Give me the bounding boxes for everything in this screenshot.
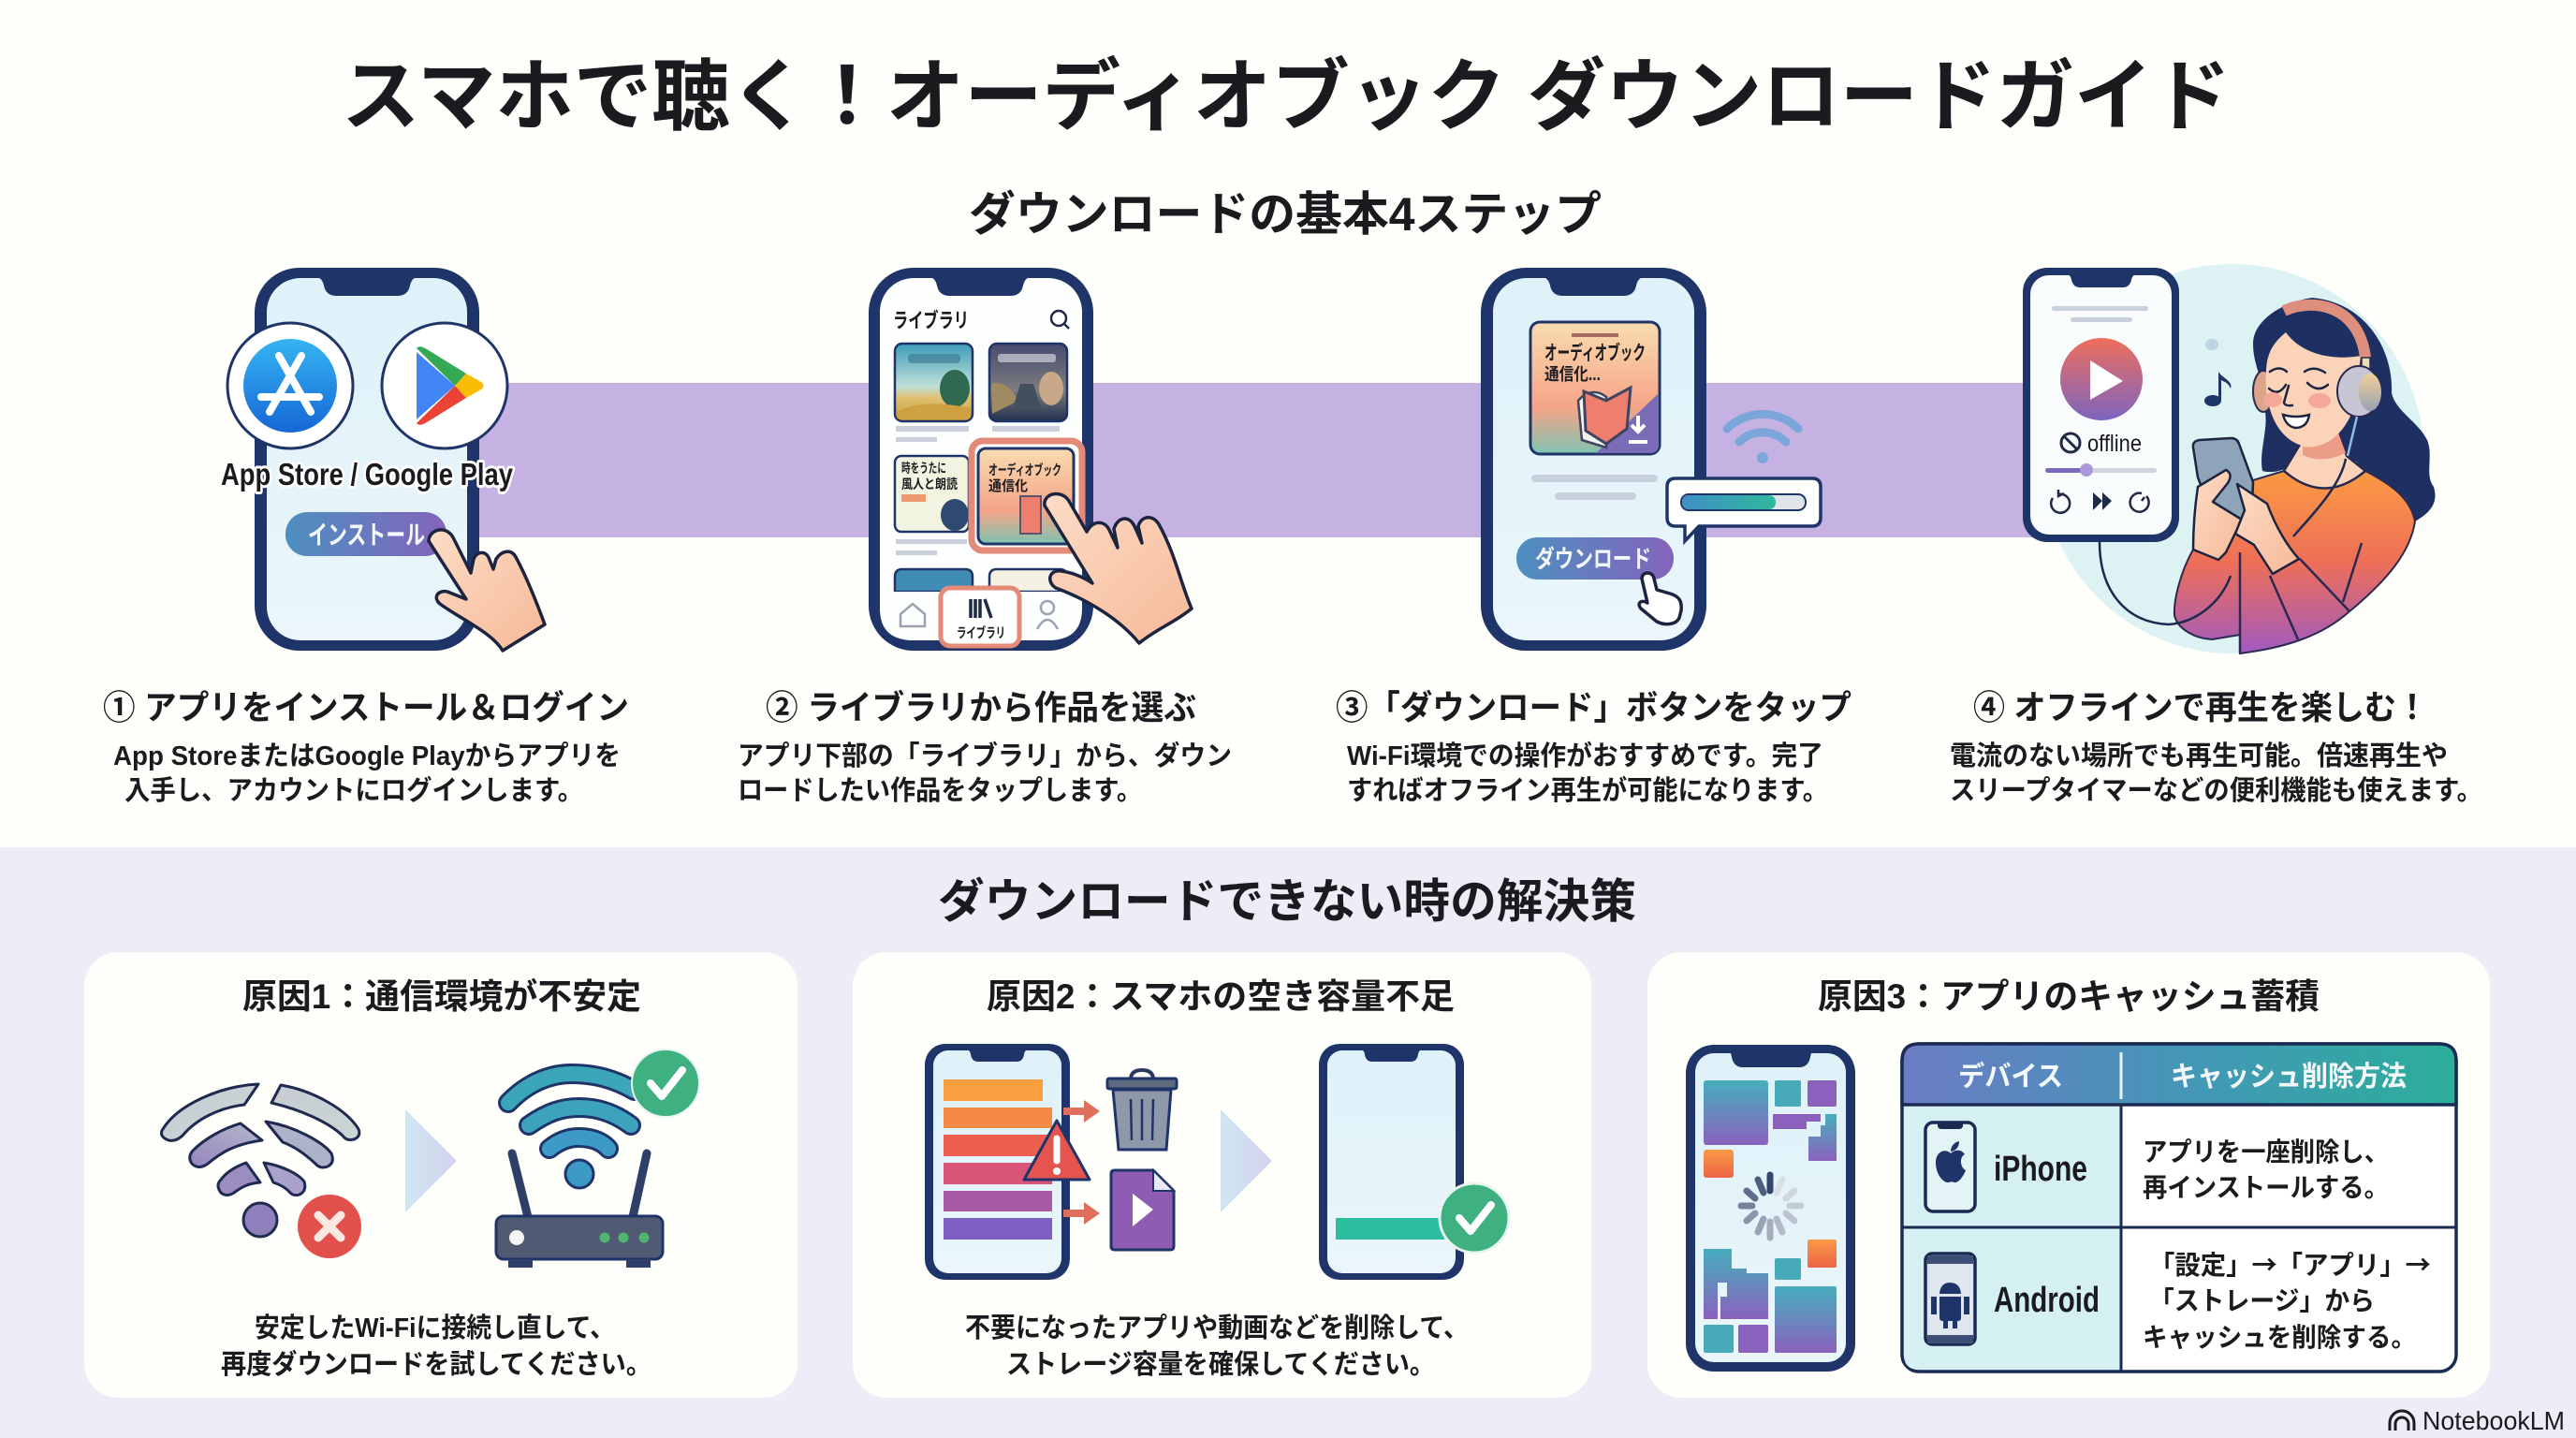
headband bbox=[2284, 305, 2365, 358]
row: Android: Android bbox=[1994, 1281, 2100, 1320]
row: Android bbox=[1925, 1245, 2431, 1352]
book cover with download mark bbox=[1530, 322, 1660, 454]
earphone wire bbox=[2348, 417, 2357, 456]
arrow to video file bbox=[1063, 1202, 1100, 1225]
phone 4 player bbox=[2023, 268, 2179, 542]
phone 3 bbox=[1481, 268, 1706, 651]
icon: router bbox=[496, 1153, 663, 1268]
book covers bbox=[895, 344, 1067, 592]
connecting purple band bbox=[468, 383, 2041, 537]
row: iPhone: 再インストールする。 bbox=[2143, 1173, 2389, 1202]
panel: cause 1 bbox=[84, 952, 798, 1398]
download button bbox=[1516, 537, 1674, 580]
step 1 description: 入手し、アカウントにログインします。 bbox=[124, 775, 583, 806]
step 2 description bbox=[738, 740, 1232, 806]
card title: 原因2：スマホの空き容量不足 bbox=[987, 977, 1455, 1016]
step 4 description: 電流のない場所でも再生可能。倍速再生や bbox=[1950, 741, 2448, 771]
step 4 text bbox=[1950, 688, 2482, 806]
progress bubble bbox=[1667, 478, 1821, 541]
face bbox=[2266, 332, 2361, 447]
card text: 再度ダウンロードを試してください。 bbox=[221, 1348, 651, 1380]
icon: healthy wifi bbox=[508, 1074, 635, 1188]
install button: インストール bbox=[308, 521, 425, 550]
icon: broken wifi bbox=[161, 1084, 359, 1237]
teal blob bbox=[2041, 264, 2424, 653]
clean phone bbox=[1319, 1044, 1464, 1280]
table header bbox=[1902, 1044, 2456, 1105]
blot bbox=[2205, 339, 2218, 350]
table header: キャッシュ削除方法 bbox=[2171, 1062, 2407, 1093]
card text bbox=[965, 1313, 1469, 1380]
step 3 description: すればオフライン再生が可能になります。 bbox=[1347, 774, 1828, 806]
icon: green check badge bbox=[1440, 1183, 1509, 1253]
cable bbox=[2100, 459, 2346, 624]
right hand bbox=[2235, 484, 2299, 574]
cover: person: 風人と朗読 bbox=[901, 477, 958, 492]
card text bbox=[221, 1313, 651, 1380]
step 2 description: ロードしたい作品をタップします。 bbox=[738, 775, 1142, 806]
woman with headphones bbox=[2174, 298, 2435, 653]
step 1 description bbox=[113, 741, 621, 806]
phone in hand bbox=[2193, 438, 2253, 534]
card text: ストレージ容量を確保してください。 bbox=[1006, 1349, 1435, 1380]
store label: App Store / Google Play bbox=[221, 457, 514, 492]
step 3 text bbox=[1336, 688, 1852, 806]
step 1 title: ① アプリをインストール＆ログイン bbox=[103, 688, 629, 726]
cheeks bbox=[2263, 392, 2282, 407]
row: iPhone: アプリを一座削除し、 bbox=[2143, 1137, 2389, 1167]
card title: 原因1：通信環境が不安定 bbox=[242, 977, 641, 1016]
section: basic 4 steps bbox=[103, 188, 2482, 806]
row: Android: キャッシュを削除する。 bbox=[2143, 1323, 2416, 1352]
section heading: ダウンロードできない時の解決策 bbox=[938, 875, 1636, 928]
hair bbox=[2253, 298, 2435, 521]
step 1 text bbox=[103, 688, 629, 806]
icon: loading spinner bbox=[1741, 1175, 1801, 1238]
icon: cursor hand bbox=[1639, 573, 1681, 624]
icon: NotebookLM bbox=[2390, 1411, 2414, 1431]
placeholder lines bbox=[1531, 475, 1658, 500]
step 4 illustration bbox=[2023, 264, 2435, 653]
panel: cause 2 bbox=[853, 952, 1591, 1398]
bottom tab bar bbox=[880, 588, 1082, 646]
highlighted book bbox=[972, 441, 1082, 550]
cover: landscape bbox=[895, 344, 973, 421]
watermark text: NotebookLM bbox=[2422, 1406, 2565, 1435]
highlighted book: オーディオブック bbox=[988, 462, 1061, 478]
step 2 description: アプリ下部の「ライブラリ」から、ダウン bbox=[738, 740, 1232, 771]
cover: dark road bbox=[989, 344, 1067, 421]
icon: video file bbox=[1111, 1170, 1174, 1250]
card bbox=[853, 952, 1591, 1398]
highlighted book: 通信化 bbox=[988, 478, 1028, 494]
icon: red cross badge bbox=[298, 1195, 361, 1258]
icon: green check badge bbox=[632, 1049, 699, 1117]
step 4 title: ④ オフラインで再生を楽しむ！ bbox=[1973, 688, 2428, 726]
NotebookLM watermark bbox=[2390, 1406, 2565, 1435]
card title: 原因3：アプリのキャッシュ蓄積 bbox=[1818, 977, 2320, 1016]
lavender background band bbox=[0, 847, 2576, 1438]
title: スマホで聴く！オーディオブック ダウンロードガイド bbox=[342, 52, 2231, 140]
step 1 description: App StoreまたはGoogle Playからアプリを bbox=[113, 741, 621, 771]
cache deletion table bbox=[1902, 1044, 2456, 1372]
phone 4 player: offline bbox=[2087, 431, 2142, 457]
step 2 title: ② ライブラリから作品を選ぶ bbox=[766, 688, 1196, 726]
step 2 illustration bbox=[869, 268, 1192, 651]
sweater bbox=[2174, 471, 2415, 653]
card text: 安定したWi-Fiに接続し直して、 bbox=[255, 1313, 615, 1343]
step 4 description bbox=[1950, 741, 2482, 806]
sleeve lines bbox=[2240, 543, 2362, 653]
left earcup bbox=[2253, 371, 2274, 412]
step 3 illustration bbox=[1481, 268, 1821, 651]
full phone bbox=[925, 1044, 1070, 1280]
step 1 illustration bbox=[221, 268, 545, 651]
icon: trash can bbox=[1107, 1070, 1177, 1150]
card bbox=[84, 952, 798, 1398]
card text: 不要になったアプリや動画などを削除して、 bbox=[965, 1313, 1469, 1343]
icon: search bbox=[1051, 311, 1069, 329]
step 3 description bbox=[1347, 740, 1828, 806]
card bbox=[1647, 952, 2490, 1398]
row: Android: 「設定」→「アプリ」→ bbox=[2149, 1245, 2431, 1283]
icon: App Store bbox=[227, 323, 353, 448]
book cover with download mark: オーディオブック bbox=[1544, 342, 1646, 364]
phone with cache blocks bbox=[1686, 1045, 1855, 1372]
table device column bbox=[1904, 1107, 2121, 1370]
install button bbox=[285, 512, 446, 556]
icon: Google Play bbox=[382, 323, 507, 448]
arrow to trash bbox=[1063, 1100, 1100, 1123]
icon: wifi bbox=[1727, 414, 1798, 462]
row: iPhone bbox=[1925, 1123, 2389, 1211]
step 3 description: Wi-Fi環境での操作がおすすめです。完了 bbox=[1347, 740, 1823, 771]
phone 1 bbox=[255, 268, 479, 651]
section: troubleshooting bbox=[0, 847, 2576, 1438]
step 3 title: ③「ダウンロード」ボタンをタップ bbox=[1336, 688, 1852, 726]
section heading: ダウンロードの基本4ステップ bbox=[969, 188, 1602, 241]
step 4 description: スリープタイマーなどの便利機能も使えます。 bbox=[1950, 775, 2482, 806]
phone 2 bbox=[869, 268, 1093, 651]
panel: cause 3 bbox=[1647, 952, 2490, 1398]
table header: デバイス bbox=[1958, 1061, 2063, 1093]
cover: person bbox=[895, 456, 969, 532]
arrow bbox=[1221, 1109, 1272, 1212]
step 2 text bbox=[738, 688, 1232, 806]
row: iPhone: iPhone bbox=[1994, 1150, 2087, 1189]
icon: warning triangle bbox=[1024, 1121, 1090, 1180]
cover: person: 時をうたに bbox=[901, 461, 946, 476]
mouth bbox=[2283, 415, 2309, 428]
icon: tapping hand bbox=[429, 530, 545, 651]
library label: ライブラリ bbox=[893, 309, 969, 332]
row: Android: 「ストレージ」から bbox=[2149, 1286, 2375, 1315]
eyes and nose bbox=[2269, 369, 2328, 405]
book cover with download mark: 通信化... bbox=[1544, 365, 1601, 384]
icon: tapping hand bbox=[1045, 493, 1192, 643]
left hand bbox=[2193, 470, 2242, 560]
neck bbox=[2284, 426, 2365, 489]
download button: ダウンロード bbox=[1535, 545, 1651, 573]
bottom tab bar: ライブラリ bbox=[957, 624, 1005, 641]
right earcup bbox=[2337, 358, 2381, 417]
arrow bbox=[405, 1109, 457, 1212]
icon: music note bbox=[2204, 372, 2231, 406]
